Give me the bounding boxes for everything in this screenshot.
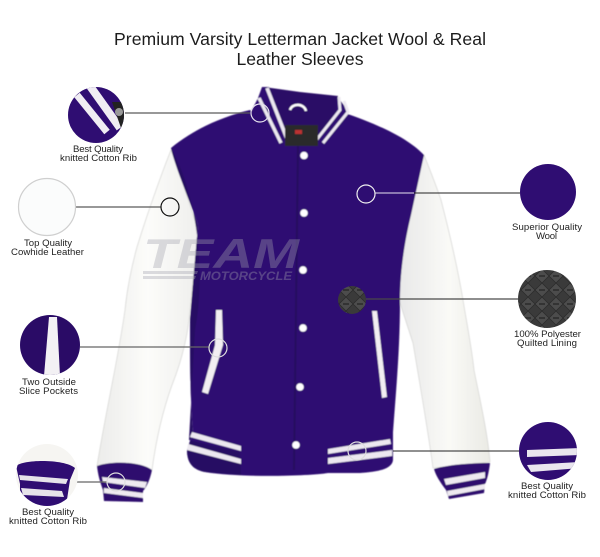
watermark: TEAM <box>143 230 300 277</box>
inset: leather: Cowhide Leather <box>11 247 85 258</box>
buttons <box>292 152 308 449</box>
collar right band <box>311 96 349 146</box>
label: Top Quality <box>24 238 72 249</box>
title: Premium Varsity Letterman Jacket Wool & Real <box>114 29 486 49</box>
jacket <box>97 87 490 502</box>
watermark: MOTORCYCLE <box>200 269 293 283</box>
inset: wool <box>512 164 582 242</box>
inset: pocket: Slice Pockets <box>19 386 78 397</box>
collar tag <box>285 125 318 146</box>
title <box>114 29 486 69</box>
markers on jacket <box>107 104 375 491</box>
placket <box>294 145 298 470</box>
inset: wool: Wool <box>536 231 557 242</box>
inset: quilted lining <box>514 270 582 349</box>
left sleeve <box>97 150 198 470</box>
label: Best Quality <box>73 144 123 155</box>
collar back <box>264 87 338 143</box>
pockets <box>202 310 223 394</box>
body <box>171 110 424 476</box>
left cuff <box>97 463 152 502</box>
inset: collar rib: knitted Cotton Rib <box>60 153 137 164</box>
hanger loop <box>290 105 306 111</box>
inset: cuff rib <box>9 444 87 527</box>
collar left band <box>251 87 291 146</box>
inset: quilted lining: Quilted Lining <box>517 338 577 349</box>
label: Best Quality <box>521 481 573 492</box>
inset: hem rib <box>508 422 586 501</box>
inset: collar rib <box>60 86 137 164</box>
label: Superior Quality <box>512 222 582 233</box>
inset: leather <box>11 178 85 258</box>
inset: cuff rib: knitted Cotton Rib <box>9 516 87 527</box>
label: Best Quality <box>22 507 74 518</box>
label: 100% Polyester <box>514 329 582 340</box>
watermark <box>143 230 300 283</box>
label: Two Outside <box>22 377 76 388</box>
right cuff <box>434 463 490 499</box>
inset: hem rib: knitted Cotton Rib <box>508 490 586 501</box>
inset: pocket <box>19 315 80 397</box>
callout lines <box>76 113 520 482</box>
marker: quilted patch <box>338 286 366 314</box>
title: Leather Sleeves <box>236 49 364 69</box>
hem stripes <box>190 432 241 451</box>
right sleeve <box>399 155 490 468</box>
